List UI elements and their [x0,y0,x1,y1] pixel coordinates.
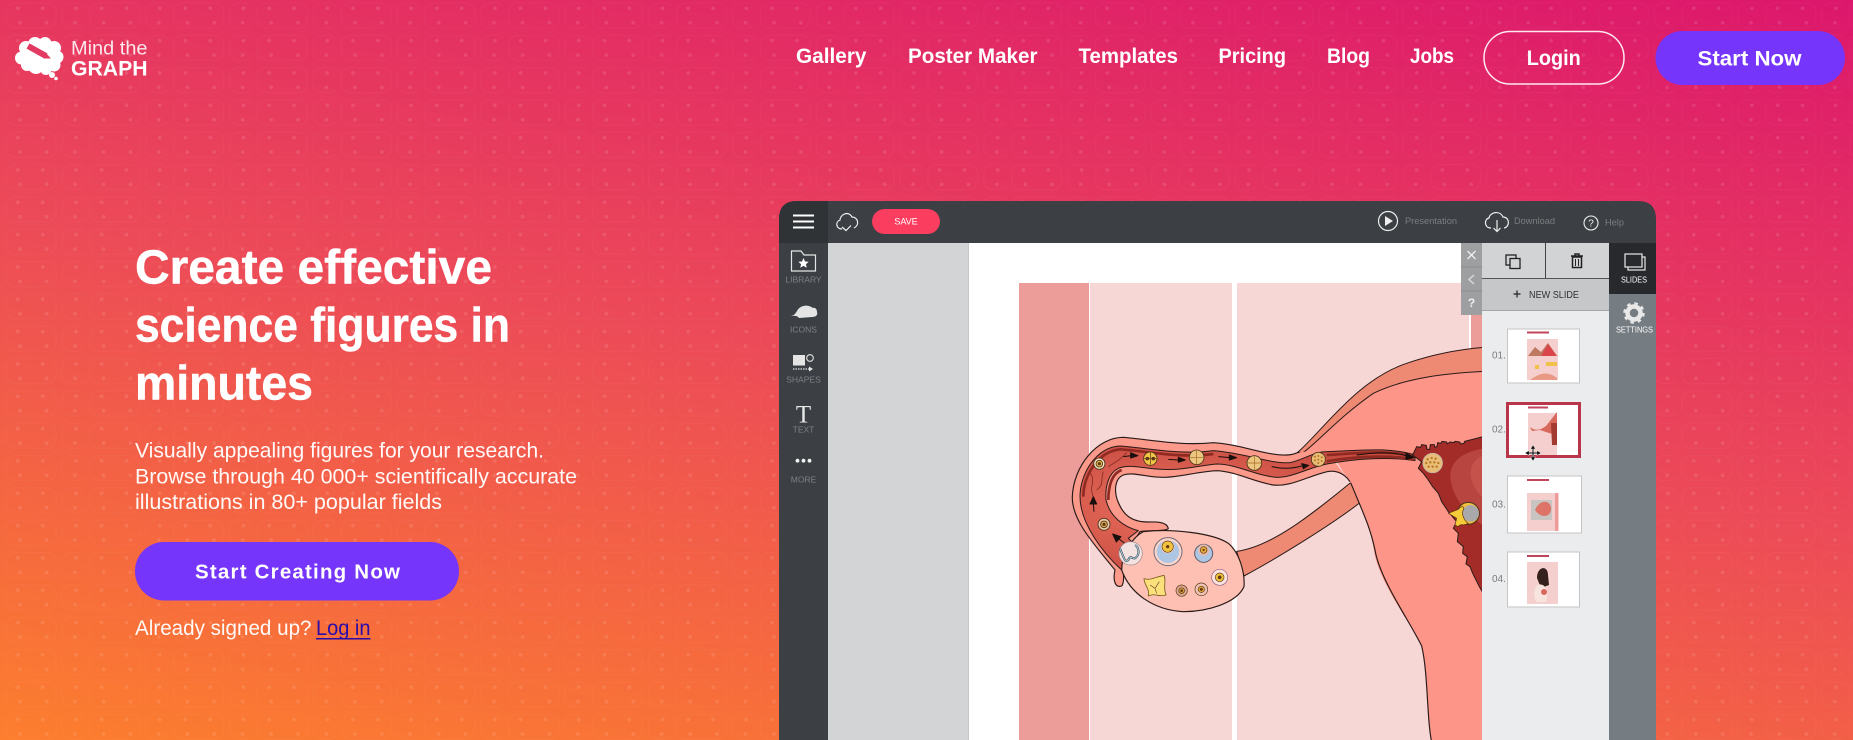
ruptured follicle [1119,542,1142,565]
icon: cloud saved [837,214,858,230]
thumbnail slide 3 [1508,476,1582,533]
corpus luteum [1144,575,1166,596]
tool: icons [790,306,817,335]
toolbar: presentation: Presentation [1405,216,1457,227]
icon: brain with pencil [15,37,64,80]
toolbar: download: Download [1514,216,1555,227]
button: Start Now: Start Now [1698,46,1802,70]
heading: minutes [135,358,313,410]
medium follicle [1195,544,1213,562]
morula texture [1314,455,1439,468]
thumbnail slide 2 selected [1508,404,1580,456]
implanting blastocyst [1448,502,1479,527]
heading: science figures in [135,300,510,352]
illustration: uterus and fallopian tube [1072,347,1485,740]
slide numbers: 01. [1492,351,1506,362]
panel: slides list [1482,243,1609,740]
toolbar: download [1485,213,1555,232]
new slide button [1482,279,1609,311]
uterine cavity with crenellated edge [1413,437,1483,593]
workspace grey area [828,243,969,740]
window frame [779,201,1656,740]
left sidebar tools [785,251,822,485]
toolbar: help [1584,216,1624,230]
tool: library [785,251,822,285]
tool: icons: ICONS [790,325,817,335]
tube embryos [1094,450,1442,530]
button: Start Creating Now: Start Creating Now [195,560,400,584]
logo: Mind the Graph [15,37,148,80]
hamburger menu block [779,201,828,243]
toolbar: help: ? [1588,218,1594,230]
navigation [796,31,1845,85]
thumbnail slide 4 [1508,552,1580,607]
button: save [872,209,940,234]
slide actions [1482,243,1609,279]
tool: text [793,402,814,435]
slide canvas [968,243,1482,740]
vessels [1090,453,1127,497]
nav link: Gallery: Gallery [796,45,867,68]
slide numbers: 04. [1492,574,1506,585]
nav link: Poster Maker: Poster Maker [908,45,1038,68]
slide numbers: 02. [1492,424,1506,436]
icon: collapse [1469,275,1474,284]
ovarian ligament [1237,483,1360,576]
nav link: Templates: Templates [1078,45,1178,68]
description paragraph [135,440,577,514]
heading [135,242,510,410]
tube arrows [1090,453,1414,545]
nav link: Pricing: Pricing [1218,45,1286,68]
logo text: GRAPH [71,58,148,80]
ovary [1122,531,1244,612]
toolbar: presentation [1378,212,1457,230]
tool: more [791,459,817,485]
description paragraph: Visually appealing figures for your research. [135,440,544,462]
button: save: SAVE [894,216,918,226]
nav link: Jobs: Jobs [1410,45,1454,68]
small follicles [1176,569,1228,596]
login prompt: Log in [316,617,370,640]
tab: settings: SETTINGS [1616,326,1653,335]
large follicle [1154,538,1182,566]
slide numbers [1492,351,1506,585]
panel: editor app window [779,201,1656,740]
new slide button: NEW SLIDE [1529,289,1579,301]
toolbar: help: Help [1605,218,1624,228]
nav link: Blog: Blog [1327,45,1370,68]
button: Start Now [1656,31,1845,85]
tool: more: MORE [791,475,817,485]
login prompt: Already signed up? [135,617,312,640]
button: Login [1484,32,1624,84]
canvas side controls [1461,243,1482,315]
button: Start Creating Now [135,542,459,600]
panel: right tab bar [1609,243,1656,740]
tab: slides: SLIDES [1621,276,1647,285]
fallopian tube wall [1072,437,1350,586]
tool: library: LIBRARY [785,275,822,285]
logo text: Mind the [71,38,148,60]
fallopian tube lumen [1080,446,1415,570]
thumbnail slide 1 [1508,329,1580,383]
tab: settings [1616,304,1653,335]
description paragraph: illustrations in 80+ popular fields [135,491,442,514]
tool: text: TEXT [793,425,814,435]
description paragraph: Browse through 40 000+ scientifically accurate [135,465,577,488]
button: Login: Login [1527,46,1581,70]
tool: text: T [796,402,811,428]
icon: help: ? [1468,296,1475,310]
logo text [71,38,148,80]
tab: slides [1609,243,1656,294]
slide numbers: 03. [1492,500,1506,511]
upper uterine wall band [1297,347,1483,455]
cursor move icon [1525,445,1541,461]
icon: close [1468,251,1476,259]
icon: trash [1571,254,1583,268]
tool: shapes: SHAPES [786,375,821,385]
uterus body [1303,371,1483,740]
icon: duplicate [1506,255,1520,268]
heading: Create effective [135,242,492,294]
tool: shapes [786,355,821,385]
